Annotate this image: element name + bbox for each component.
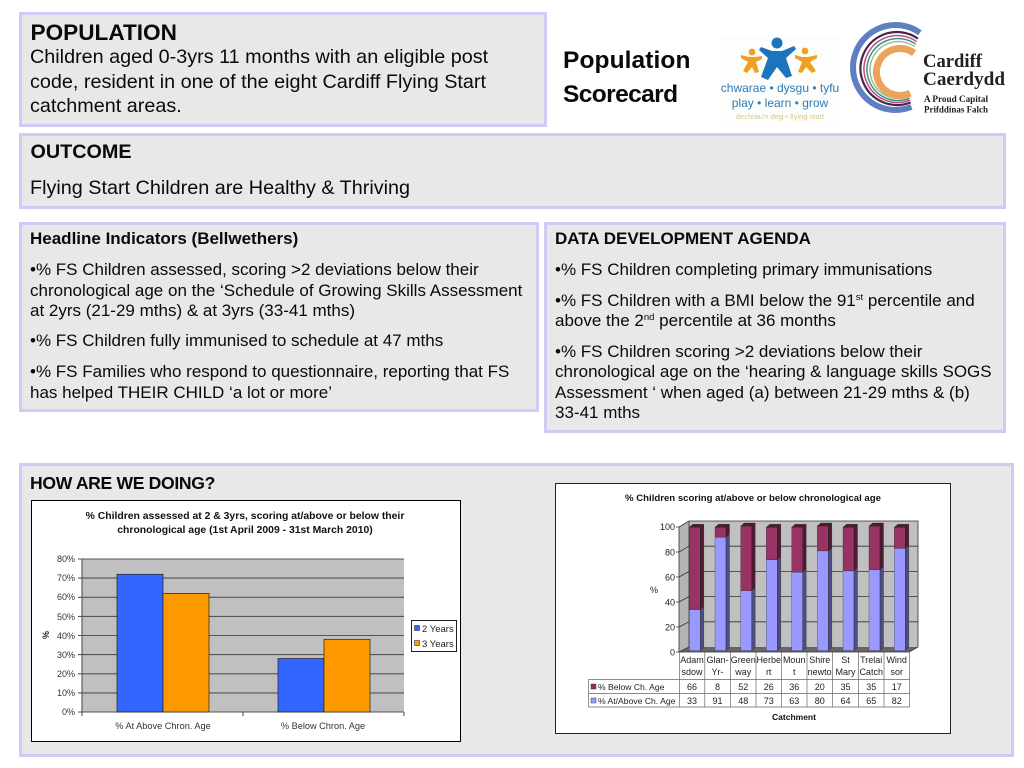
- x axis title: Catchment: [772, 712, 816, 722]
- y axis labels: 70%: [57, 573, 75, 583]
- y axis labels: [57, 554, 75, 717]
- table column headers: way: [734, 667, 752, 677]
- chart title: % Children scoring at/above or below chronological age: [625, 493, 881, 504]
- y axis labels: 20%: [57, 669, 75, 679]
- text: indicator 1: at 2yrs (21-29 mths) & at 3yrs (33-41 mths): [30, 301, 355, 320]
- bar: Adamsdown: [689, 524, 704, 651]
- icon: cardiff logo: A Proud Capital: [924, 94, 988, 104]
- table column headers: rt: [766, 667, 772, 677]
- table row: below chronological age: 35: [840, 682, 851, 692]
- table row: below chronological age: 66: [687, 682, 697, 692]
- table column headers: sor: [890, 667, 903, 677]
- y axis labels: 60: [665, 572, 675, 582]
- text: agenda item 3: 33-41 mths: [555, 403, 640, 422]
- bars: at above chronological age: [117, 574, 209, 712]
- table column headers: Catch: [859, 667, 883, 677]
- plot area: [82, 559, 404, 712]
- y axis labels: 80%: [57, 554, 75, 564]
- table row: below chronological age: 8: [715, 682, 720, 692]
- bar: Herbert: [766, 524, 781, 651]
- table column headers: Mary: [836, 667, 856, 677]
- table row: at above chronological age: 33: [687, 696, 697, 706]
- legend: [412, 620, 456, 652]
- table row: at above chronological age: 63: [789, 696, 799, 706]
- chart: children assessed at 2 and 3 years: chronological age (1st April 2009 - 31st March 2010): [117, 525, 373, 536]
- bars: below chronological age: [278, 639, 370, 712]
- panel: outcome: [19, 133, 1006, 209]
- text: indicator 1: [30, 260, 522, 320]
- panel: how are we doing: [19, 463, 1014, 757]
- icon: flying start logo: dechrau'n deg • flying start: [736, 112, 825, 121]
- heading: population scorecard: Population: [563, 47, 691, 74]
- x axis labels: [115, 721, 365, 731]
- chart title: % Children assessed at 2 & 3yrs, scoring at/above or below their: [86, 511, 404, 522]
- y axis labels: 50%: [57, 612, 75, 622]
- table row: below chronological age: 17: [892, 682, 902, 692]
- y axis title: %: [650, 585, 658, 595]
- text: indicator 1: •% FS Children assessed, scoring >2 deviations below their: [30, 260, 479, 279]
- icon: cardiff logo: Prifddinas Falch: [924, 104, 988, 114]
- chart: children assessed at 2 and 3 years: [31, 500, 461, 742]
- table row: below chronological age: 52: [738, 682, 748, 692]
- text: indicator 1: chronological age on the ‘Schedule of Growing Skills Assessment: [30, 280, 522, 300]
- bar: Mount: [792, 524, 806, 651]
- bar: Shirenewton: [817, 523, 832, 651]
- text: agenda item 3: •% FS Children scoring >2 deviations below their: [555, 342, 922, 361]
- y axis labels: 40%: [57, 631, 75, 641]
- icon: flying start logo: [721, 38, 839, 121]
- y axis labels: 80: [665, 548, 675, 558]
- heading: data development agenda: DATA DEVELOPMENT AGENDA: [555, 229, 811, 248]
- 3d plot walls: [679, 521, 918, 652]
- text: population definition: catchment areas.: [30, 95, 182, 117]
- table row: at above chronological age: 48: [738, 696, 748, 706]
- text: population definition: [30, 46, 488, 117]
- table column headers: Yr-: [712, 667, 724, 677]
- bar: Trelai Catch: [869, 523, 884, 651]
- stacked bars: [689, 523, 909, 651]
- table row: below chronological age: 36: [789, 682, 799, 692]
- text: indicator 3: [30, 362, 509, 402]
- y axis labels: [660, 522, 675, 658]
- table row: below chronological age: [591, 682, 902, 692]
- table row: below chronological age: % Below Ch. Age: [598, 682, 665, 692]
- bar: Windsor: [894, 524, 909, 651]
- text: agenda item 2: •% FS Children with a BMI below the 91st percentile and: [555, 291, 975, 310]
- table column headers: [680, 655, 907, 677]
- table column headers: Glan-: [706, 655, 729, 665]
- table row: below chronological age: 26: [764, 682, 774, 692]
- table row: at above chronological age: 80: [815, 696, 825, 706]
- heading: population: POPULATION: [30, 20, 177, 45]
- table column headers: Trelai: [860, 655, 882, 665]
- table row: at above chronological age: % At/Above Ch. Age: [598, 696, 676, 706]
- table column headers: Wind: [886, 655, 907, 665]
- table column headers: Adam: [680, 655, 704, 665]
- y axis title: %: [41, 631, 51, 639]
- text: population definition: code, resident in one of the eight Cardiff Flying Start: [30, 70, 486, 92]
- bar: St Mary: [843, 524, 858, 651]
- table column headers: Shire: [809, 655, 830, 665]
- data table: [588, 652, 910, 707]
- text: agenda item 3: [555, 342, 992, 422]
- text: agenda item 2: above the 2nd percentile at 36 months: [555, 311, 836, 330]
- y axis labels: 20: [665, 622, 675, 632]
- table row: at above chronological age: 82: [892, 696, 902, 706]
- table row: at above chronological age: [591, 696, 902, 706]
- y axis labels: 100: [660, 522, 675, 532]
- y axis labels: 0: [670, 648, 675, 658]
- text: agenda item 1: •% FS Children completing primary immunisations: [555, 260, 932, 279]
- table row: at above chronological age: 91: [712, 696, 723, 706]
- panel: data development agenda: [544, 222, 1006, 433]
- table column headers: St: [841, 655, 850, 665]
- y axis labels: 40: [665, 598, 675, 608]
- table row: at above chronological age: 64: [840, 696, 851, 706]
- y axis labels: 30%: [57, 650, 75, 660]
- heading: how are we doing: HOW ARE WE DOING?: [30, 473, 215, 493]
- text: indicator 2: •% FS Children fully immunised to schedule at 47 mths: [30, 331, 443, 350]
- table column headers: Moun: [783, 655, 805, 665]
- heading: headline indicators: Headline Indicators (Bellwethers): [30, 229, 298, 248]
- icon: flying start logo: play • learn • grow: [732, 96, 829, 110]
- legend: 3 Years: [422, 639, 454, 650]
- table row: below chronological age: 20: [815, 682, 825, 692]
- icon: cardiff logo: [850, 22, 1005, 114]
- table column headers: newto: [808, 667, 832, 677]
- text: agenda item 2: [555, 291, 975, 330]
- bar: Glan-Yr-: [715, 524, 730, 651]
- icon: cardiff logo: Caerdydd: [923, 69, 1005, 90]
- table column headers: Green: [731, 655, 756, 665]
- icon: cardiff logo: Cardiff: [923, 51, 983, 72]
- x axis labels: % At Above Chron. Age: [115, 721, 211, 731]
- panel: headline indicators: [19, 222, 539, 412]
- y axis labels: 0%: [62, 707, 75, 717]
- text: indicator 3: has helped THEIR CHILD ‘a lot or more’: [30, 382, 332, 402]
- x axis labels: % Below Chron. Age: [281, 721, 365, 731]
- text: outcome statement: Flying Start Children are Healthy & Thriving: [30, 177, 410, 199]
- text: population definition: Children aged 0-3yrs 11 months with an eligible post: [30, 46, 488, 68]
- chart: children scoring by catchment: [555, 483, 951, 734]
- text: indicator 3: •% FS Families who respond to questionnaire, reporting that FS: [30, 362, 509, 381]
- heading: population scorecard: Scorecard: [563, 81, 677, 108]
- panel: population: [19, 12, 547, 127]
- heading: outcome: OUTCOME: [30, 141, 132, 163]
- table row: at above chronological age: 73: [764, 696, 774, 706]
- text: agenda item 3: Assessment ‘ when aged (a) between 21-29 mths & (b): [555, 383, 970, 402]
- icon: flying start logo: chwarae • dysgu • tyfu: [721, 81, 839, 95]
- table column headers: sdow: [681, 667, 703, 677]
- y axis labels: 60%: [57, 592, 75, 602]
- text: agenda item 3: chronological age on the ‘hearing & language skills SOGS: [555, 362, 992, 381]
- table column headers: Herbe: [756, 655, 781, 665]
- bar: Greenway: [741, 523, 755, 651]
- legend: 2 Years: [422, 624, 454, 635]
- y axis labels: 10%: [57, 688, 75, 698]
- heading: population scorecard: [563, 47, 691, 108]
- table row: at above chronological age: 65: [866, 696, 876, 706]
- table column headers: t: [793, 667, 796, 677]
- table row: below chronological age: 35: [866, 682, 876, 692]
